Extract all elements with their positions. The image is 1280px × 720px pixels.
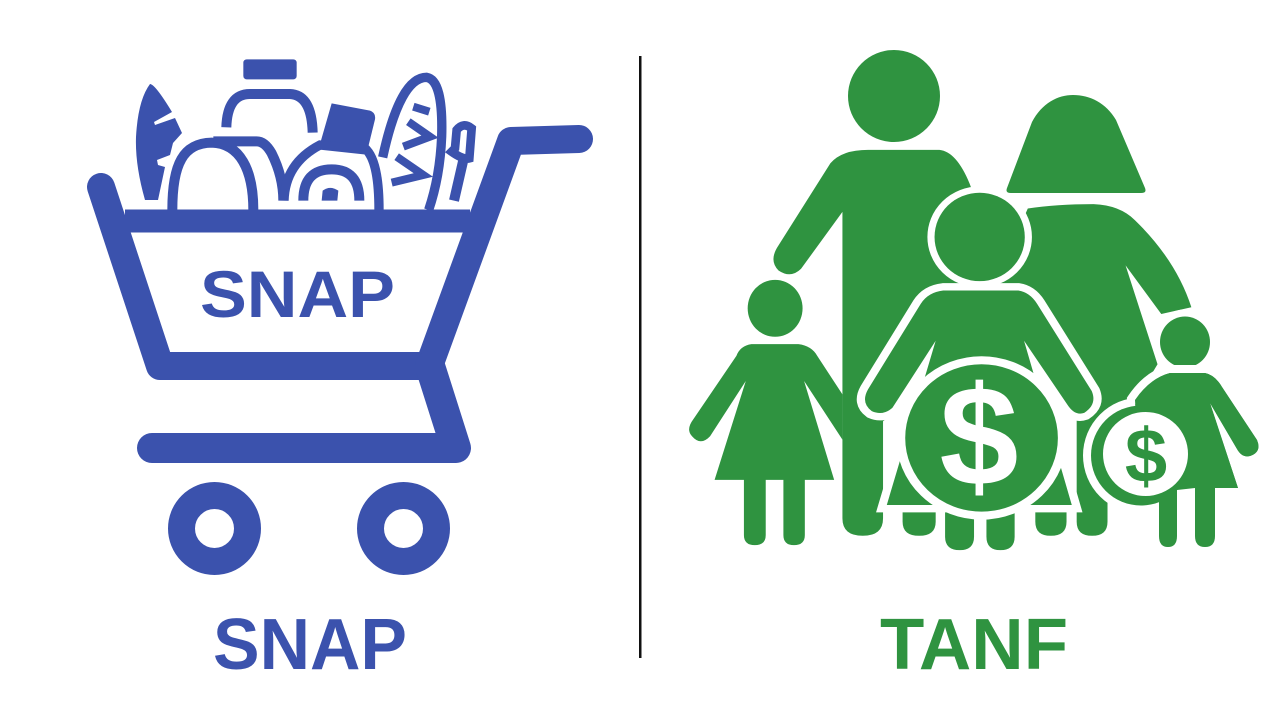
icon: shopping cart [101, 139, 579, 562]
icon: jar [284, 103, 379, 210]
figure: man head [848, 50, 940, 142]
figure: right girl body outline [1135, 373, 1258, 488]
icon: white dollar sign: $ [940, 357, 1018, 516]
figure: right girl with small dollar coin [1083, 316, 1258, 547]
icon: family with dollar coins [689, 50, 1258, 550]
icon: small dollar coin ring [1091, 406, 1191, 506]
cart label: SNAP: SNAP [200, 257, 395, 331]
panel: SNAP [101, 59, 579, 685]
figure: woman body [981, 204, 1191, 536]
figure: outer legs [903, 498, 1067, 536]
icon: bottle [226, 59, 313, 133]
icon: loaf [172, 141, 283, 210]
heading: TANF: TANF [880, 605, 1068, 685]
icon: large dollar coin [901, 360, 1062, 516]
panel: TANF [689, 50, 1258, 685]
icon: small bottle [452, 125, 472, 201]
icon: green dollar sign: $ [1125, 414, 1167, 499]
figure: right girl body [1135, 373, 1258, 547]
divider line [639, 56, 642, 658]
icon: fish [136, 84, 182, 200]
groceries in cart [172, 59, 472, 210]
figure: left girl [689, 280, 842, 545]
coin outline [1083, 398, 1199, 514]
heading: SNAP: SNAP [213, 605, 407, 685]
small coin centre [1103, 412, 1188, 496]
figure: right girl head [1160, 316, 1210, 368]
icon: baguette [383, 77, 442, 210]
figure: man body [773, 150, 1018, 536]
figure: center child [865, 193, 1093, 550]
figure: woman hair [1006, 95, 1146, 193]
